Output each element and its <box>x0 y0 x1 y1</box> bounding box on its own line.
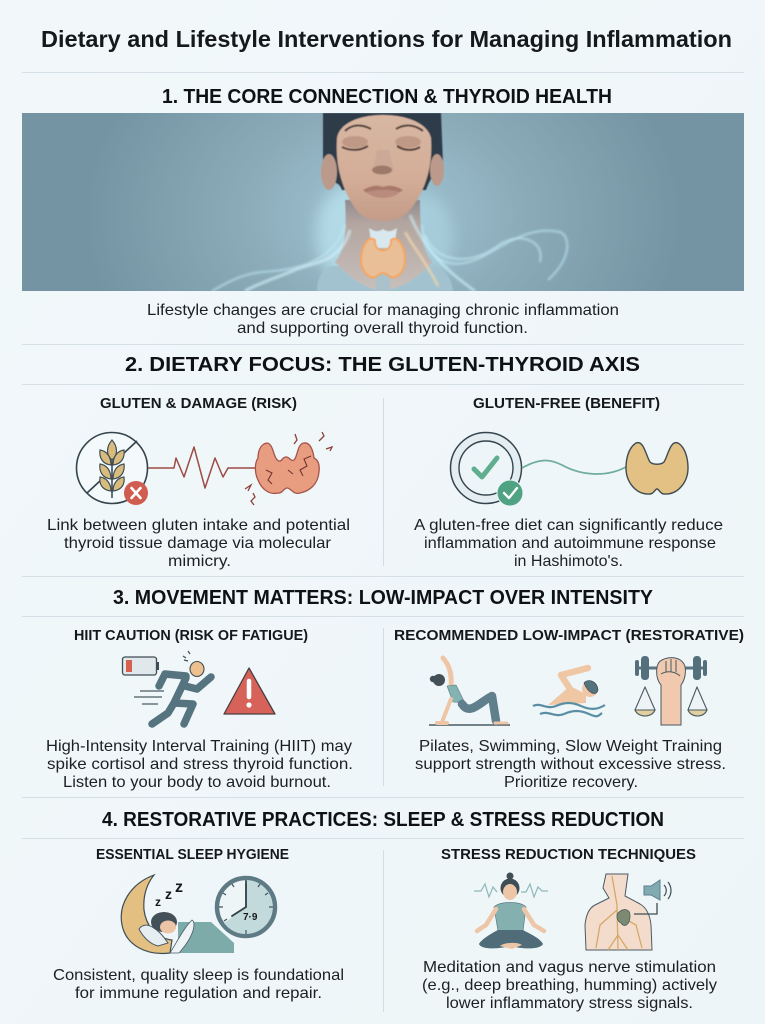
icon: dumbbell, fist and scales <box>635 656 707 725</box>
text: low-impact description: Pilates, Swimming, Slow Weight Training <box>419 738 722 755</box>
text: gluten risk description: Link between gluten intake and potential <box>47 517 350 534</box>
icon: moon and sleeping person: z <box>165 886 172 902</box>
text: sleep description: for immune regulation and repair. <box>75 985 322 1002</box>
text: sleep description <box>53 967 344 1002</box>
heading: section 3: 3. MOVEMENT MATTERS: LOW-IMPACT OVER INTENSITY <box>113 587 654 609</box>
icon: moon and sleeping person: z <box>155 895 161 909</box>
text: HIIT description <box>46 738 353 791</box>
text: stress description: lower inflammatory stress signals. <box>446 995 693 1012</box>
text: low-impact description: support strength without excessive stress. <box>415 756 726 773</box>
text: low-impact description: Prioritize recovery. <box>504 774 638 791</box>
heading: section 1: 1. THE CORE CONNECTION & THYROID HEALTH <box>162 86 612 108</box>
text: HIIT description: spike cortisol and stress thyroid function. <box>47 756 353 773</box>
text: stress description: (e.g., deep breathing, humming) actively <box>422 977 717 994</box>
subheading: HIIT caution: HIIT CAUTION (RISK OF FATIGUE) <box>74 628 308 644</box>
icon: check plate <box>450 432 523 506</box>
subheading: gluten and damage: GLUTEN & DAMAGE (RISK) <box>100 396 297 412</box>
heading: section 4: 4. RESTORATIVE PRACTICES: SLEEP & STRESS REDUCTION <box>102 809 664 831</box>
text: gluten risk description: mimicry. <box>168 553 231 570</box>
icon: damaged thyroid <box>245 432 332 505</box>
icon: warning triangle <box>224 668 275 714</box>
icon: vagus nerve torso and sound <box>585 874 671 950</box>
text: HIIT description: High-Intensity Interval Training (HIIT) may <box>46 738 352 755</box>
panel: movement matters <box>46 587 744 791</box>
panel: core connection and thyroid health <box>22 86 744 337</box>
title: Dietary and Lifestyle Interventions for Managing Inflammation <box>41 26 732 52</box>
text: gluten risk description <box>47 517 350 570</box>
text: stress description <box>422 959 717 1012</box>
icon: swimmer <box>533 668 605 716</box>
text: stress description: Meditation and vagus nerve stimulation <box>423 959 716 976</box>
subheading: sleep hygiene: ESSENTIAL SLEEP HYGIENE <box>96 847 289 863</box>
panel: restorative practices <box>53 809 717 1012</box>
icon: healthy thyroid <box>626 443 688 494</box>
icon: connecting line <box>522 460 626 474</box>
text: gluten-free description <box>414 517 723 570</box>
subheading: stress reduction: STRESS REDUCTION TECHNIQUES <box>441 847 696 863</box>
illustration: woman with glowing thyroid <box>22 113 744 291</box>
icon: pulse line <box>148 447 257 488</box>
caption: Lifestyle changes are crucial for managing chronic inflammation <box>147 302 619 319</box>
icon: moon and sleeping person: z <box>175 879 183 896</box>
icon: clock showing 7-9: 7·9 <box>243 912 258 923</box>
text: gluten-free description: inflammation and autoimmune response <box>424 535 716 552</box>
heading: section 2: 2. DIETARY FOCUS: THE GLUTEN-THYROID AXIS <box>125 354 640 376</box>
text: sleep description: Consistent, quality sleep is foundational <box>53 967 344 984</box>
text: gluten-free description: in Hashimoto's. <box>514 553 623 570</box>
icon: clock showing 7-9 <box>217 878 275 936</box>
caption <box>147 302 619 337</box>
icon: pilates <box>429 658 510 725</box>
icon: crossed-out wheat <box>76 432 148 505</box>
text: gluten-free description: A gluten-free diet can significantly reduce <box>414 517 723 534</box>
subheading: recommended low-impact: RECOMMENDED LOW-IMPACT (RESTORATIVE) <box>394 628 744 644</box>
icon: running figure <box>134 651 211 724</box>
caption: and supporting overall thyroid function. <box>237 320 528 337</box>
subheading: gluten-free: GLUTEN-FREE (BENEFIT) <box>473 396 660 412</box>
text: HIIT description: Listen to your body to avoid burnout. <box>63 774 331 791</box>
icon: moon and sleeping person <box>121 875 234 953</box>
text: low-impact description <box>415 738 726 791</box>
text: gluten risk description: thyroid tissue damage via molecular <box>64 535 332 552</box>
icon: meditating figure <box>474 872 548 949</box>
icon: low battery <box>122 657 159 675</box>
panel: dietary focus <box>47 354 723 570</box>
